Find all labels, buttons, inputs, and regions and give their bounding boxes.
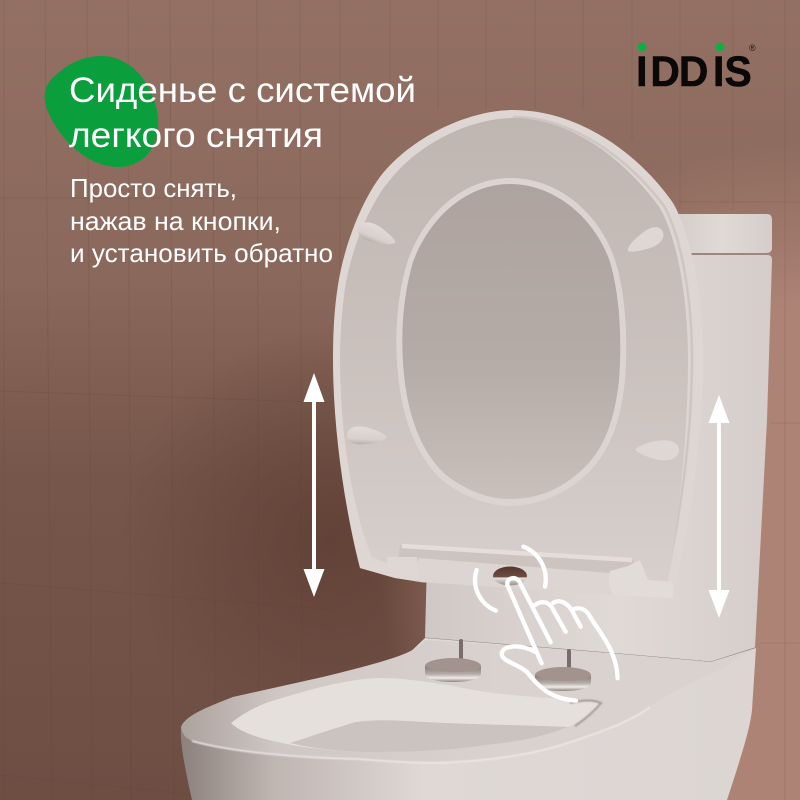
hinge rail ridge xyxy=(402,546,632,560)
logo dots xyxy=(638,42,724,52)
hinge end right xyxy=(609,560,673,598)
hinge cylinder xyxy=(417,558,613,595)
bumper top right xyxy=(623,223,667,259)
bowl opening xyxy=(231,678,601,752)
bowl rim front highlight xyxy=(192,707,650,763)
press wave left xyxy=(475,570,496,611)
toilet seat lid xyxy=(333,110,703,598)
bumper lower left xyxy=(347,426,387,446)
inner oval xyxy=(402,184,620,499)
arrow: left vertical double arrow xyxy=(304,373,324,597)
press wave right xyxy=(523,547,546,587)
hinge recess xyxy=(396,545,640,595)
arrow: right vertical double arrow xyxy=(708,395,730,618)
subtitle text: Просто снять, xyxy=(70,173,237,203)
bumper top left xyxy=(355,219,399,251)
subtitle text xyxy=(70,173,333,268)
hinge post right xyxy=(535,649,591,691)
index finger xyxy=(507,578,551,663)
middle finger xyxy=(535,602,566,632)
bowl inner water area xyxy=(290,720,568,752)
subtitle text: нажав на кнопки, xyxy=(70,206,281,236)
bowl rim top surface xyxy=(181,640,756,763)
green blob xyxy=(45,56,158,167)
bowl body xyxy=(181,638,756,800)
title: легкого снятия xyxy=(69,116,323,155)
thumb and palm xyxy=(502,646,576,701)
hinge end left xyxy=(360,557,419,581)
toilet bowl xyxy=(181,638,756,800)
cistern tank xyxy=(425,214,772,662)
seat outer rim xyxy=(333,110,703,598)
icon: pressing hand xyxy=(475,547,618,701)
seat edge shadow xyxy=(513,117,692,590)
logo: IDDIS: IDDIS xyxy=(636,47,752,95)
registered mark: ® xyxy=(749,43,756,53)
release button xyxy=(493,566,527,586)
bowl hole highlight xyxy=(570,700,601,726)
ring finger xyxy=(553,601,581,627)
title: Сиденье с системой xyxy=(69,71,416,110)
title xyxy=(69,71,416,155)
seat face xyxy=(340,118,688,590)
little finger and palm edge xyxy=(572,608,618,678)
subtitle text: и установить обратно xyxy=(70,238,333,268)
hinge post left xyxy=(425,639,481,682)
inner oval ridge xyxy=(396,178,626,506)
bumper lower right xyxy=(635,440,679,460)
